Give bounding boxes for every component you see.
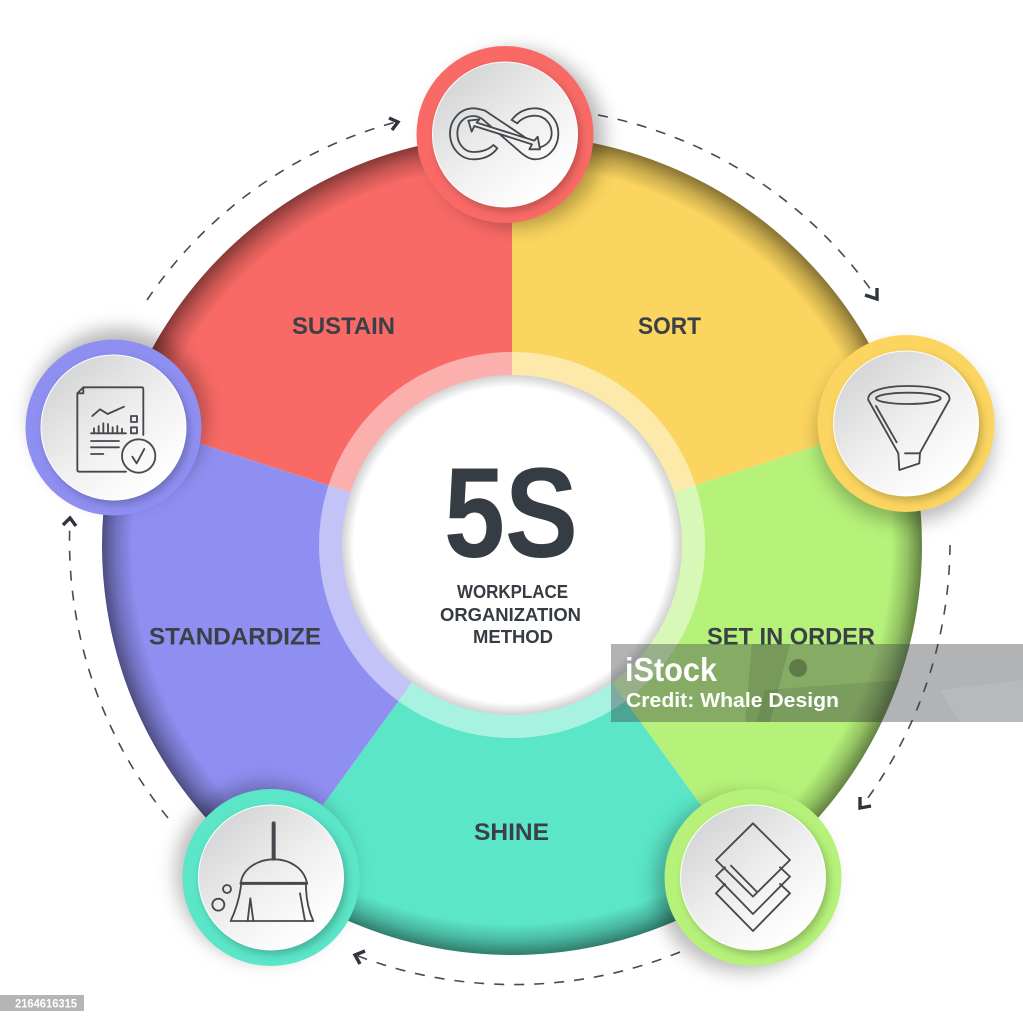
- node: set in order: [664, 789, 842, 966]
- icon: broom: [212, 823, 313, 921]
- watermark band: [611, 644, 1023, 722]
- hub subtitle: WORKPLACE: [457, 582, 568, 602]
- white hub disc: [342, 375, 682, 715]
- stock id tag: [0, 995, 84, 1011]
- sector: shine: [271, 545, 753, 955]
- hub subtitle: ORGANIZATION: [440, 605, 581, 625]
- watermark logo: iStock: [625, 651, 718, 688]
- icon: stacked layers: [716, 823, 790, 931]
- label: set in order: SET IN ORDER: [707, 624, 875, 650]
- white disc: [198, 805, 344, 950]
- label: sustain: SUSTAIN: [292, 313, 395, 340]
- white disc: [432, 62, 578, 207]
- arrow: standardize to sustain: [147, 118, 398, 300]
- sector: standardize: [102, 418, 512, 877]
- wheel outer edge shadow: [102, 135, 922, 955]
- node: standardize: [26, 340, 202, 516]
- label: shine: SHINE: [474, 819, 549, 846]
- dashed cycle arrows: [63, 115, 950, 985]
- watermark credit: Credit: Whale Design: [626, 690, 839, 712]
- icon: infinity with arrows: [450, 108, 558, 159]
- center hub: [319, 352, 705, 738]
- sector: set in order: [512, 418, 922, 877]
- sector: sort: [512, 135, 902, 545]
- white disc: [834, 351, 978, 496]
- watermark background: [611, 644, 1023, 722]
- node: sort: [818, 335, 994, 512]
- translucent hub ring: [319, 352, 705, 738]
- node: sustain: [416, 46, 594, 223]
- icon: report with check mark: [77, 387, 155, 473]
- hub subtitle: [440, 582, 581, 647]
- big 5S heading: 5S: [444, 442, 578, 585]
- sector labels: [149, 313, 875, 846]
- stock id tag: 2164616315: [15, 998, 78, 1010]
- white disc: [680, 805, 826, 950]
- coloured ring: [26, 340, 202, 516]
- icon: funnel: [868, 386, 949, 470]
- coloured ring: [818, 335, 994, 512]
- arrow: shine to standardize: [63, 518, 168, 818]
- arrow: sustain to sort: [598, 115, 877, 299]
- label: sort: SORT: [638, 313, 701, 340]
- coloured ring: [664, 789, 842, 966]
- coloured ring: [416, 46, 594, 223]
- arrow: set in order to shine: [355, 951, 680, 985]
- white disc: [41, 355, 186, 500]
- arrow: sort to set in order: [860, 545, 950, 808]
- node: shine: [182, 789, 360, 966]
- hub subtitle: METHOD: [473, 627, 553, 647]
- coloured ring: [182, 789, 360, 966]
- sector: sustain: [122, 135, 512, 545]
- wheel of five sectors: [102, 135, 922, 955]
- label: standardize: STANDARDIZE: [149, 624, 321, 650]
